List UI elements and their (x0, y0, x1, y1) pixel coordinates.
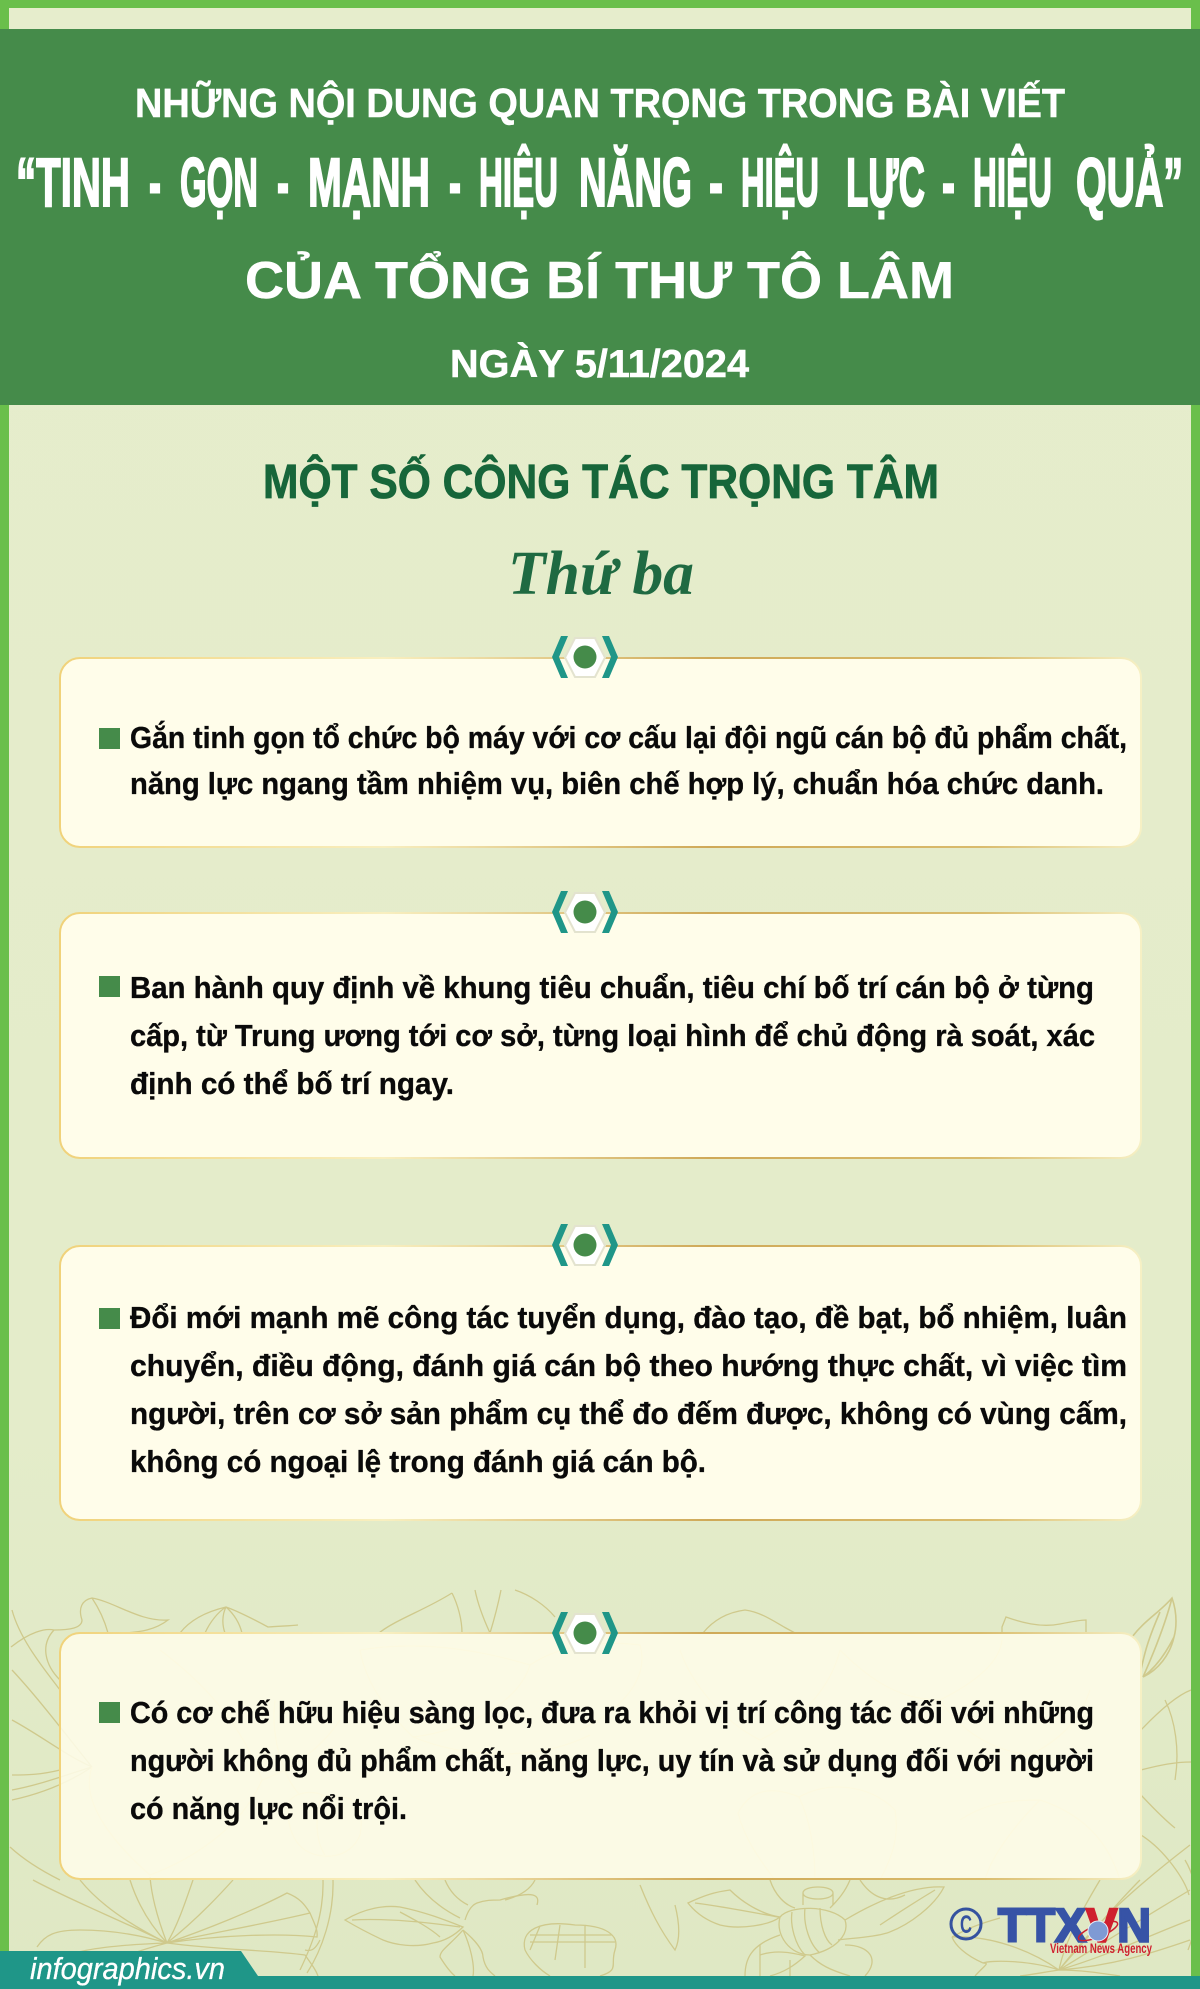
footer site name: infographics.vn (30, 1951, 225, 1986)
lotus line-art background (10, 1590, 1197, 1976)
icon: card 2 marker (552, 891, 618, 933)
card 3 text: Đổi mới mạnh mẽ công tác tuyển dụng, đào tạo, đề bạt, bổ nhiệm, luân (130, 1300, 1127, 1335)
card 3 text: không có ngoại lệ trong đánh giá cán bộ. (130, 1444, 706, 1479)
logo: copyright TTXVN: TTXVN (998, 1898, 1151, 1952)
header line 3: CỦA TỔNG BÍ THƯ TÔ LÂM (245, 251, 954, 310)
card 2 text: Ban hành quy định về khung tiêu chuẩn, tiêu chí bố trí cán bộ ở từng (130, 970, 1094, 1005)
header line 2: LỰC (846, 144, 925, 221)
logo: copyright TTXVN: Vietnam News Agency (1050, 1941, 1152, 1956)
header line 2: - (449, 144, 461, 221)
card 1 text: năng lực ngang tầm nhiệm vụ, biên chế hợp lý, chuẩn hóa chức danh. (130, 766, 1104, 801)
panel: card 4 (60, 1612, 1141, 1879)
card 1 text: Gắn tinh gọn tổ chức bộ máy với cơ cấu lại đội ngũ cán bộ đủ phẩm chất, (130, 719, 1127, 755)
section heading: MỘT SỐ CÔNG TÁC TRỌNG TÂM (263, 454, 939, 509)
stems (300, 1880, 333, 1973)
header line 2: HIỆU (479, 144, 558, 221)
card 4 text: có năng lực nổi trội. (130, 1791, 407, 1826)
card 2 text: cấp, từ Trung ương tới cơ sở, từng loại hình để chủ động rà soát, xác (130, 1018, 1095, 1053)
header line 2: - (149, 144, 161, 221)
header banner (0, 29, 1200, 405)
panel: card 1 (60, 636, 1141, 847)
right side rays (1141, 1690, 1191, 1828)
top spiky petals (180, 1607, 298, 1633)
bullet (99, 1308, 120, 1329)
card 4 text (130, 1695, 1094, 1826)
card 2 text (130, 970, 1095, 1101)
panel: card 3 (60, 1224, 1141, 1520)
bullet (99, 728, 120, 749)
icon: card 4 marker (552, 1612, 618, 1654)
bottom-right leaf (952, 1845, 1190, 1976)
header line 2: HIỆU (741, 144, 819, 221)
central flower with seed pod (524, 1924, 616, 1976)
footer band (0, 1951, 1200, 1989)
left side rays (12, 1610, 92, 1800)
header date: NGÀY 5/11/2024 (450, 342, 749, 386)
icon: card 1 marker (552, 636, 618, 678)
bullet (99, 1702, 120, 1723)
top centre leaf (379, 1590, 555, 1633)
card 2 text: định có thể bố trí ngay. (130, 1066, 454, 1101)
top-right bud (1132, 1598, 1176, 1677)
header line 2: “TINH (16, 144, 130, 221)
card 1 text (130, 719, 1127, 801)
logo: copyright TTXVN: C (960, 1911, 972, 1939)
header line 2: HIỆU (973, 144, 1052, 221)
header line 2: - (709, 144, 723, 221)
card 3 text: chuyển, điều động, đánh giá cán bộ theo hướng thực chất, vì việc tìm (130, 1348, 1127, 1383)
icon: card 3 marker (552, 1224, 618, 1266)
card 3 text (130, 1300, 1127, 1479)
header line 1: NHỮNG NỘI DUNG QUAN TRỌNG TRONG BÀI VIẾT (135, 80, 1065, 126)
bottom-left leaf (10, 1847, 318, 1976)
header line 2 (16, 144, 1183, 221)
top right petals (703, 1610, 1086, 1633)
flower centre-left leaf (345, 1906, 463, 1946)
section subheading: Thứ ba (508, 540, 694, 608)
top-left bud (11, 1598, 168, 1680)
header line 2: MẠNH (308, 144, 430, 221)
card 4 text: người không đủ phẩm chất, năng lực, uy tín và sử dụng đối với người (130, 1743, 1094, 1778)
bullet (99, 976, 120, 997)
header line 2: GỌN (180, 144, 258, 221)
header line 2: - (942, 144, 955, 221)
card 4 text: Có cơ chế hữu hiệu sàng lọc, đưa ra khỏi vị trí công tác đối với những (130, 1695, 1094, 1730)
header line 2: NĂNG (579, 144, 692, 221)
panel: card 2 (60, 891, 1141, 1158)
big petals behind card 4 (360, 1646, 530, 1737)
header line 2: - (277, 144, 289, 221)
card 3 text: người, trên cơ sở sản phẩm cụ thể đo đếm được, không có vùng cấm, (130, 1396, 1127, 1431)
